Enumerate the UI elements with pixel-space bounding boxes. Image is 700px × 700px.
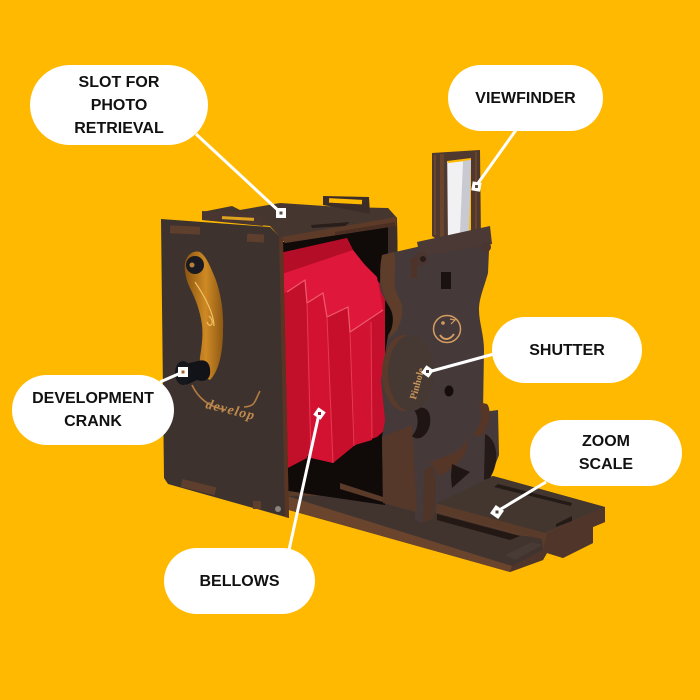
front standard board <box>380 226 499 523</box>
leader: zoom scale <box>490 482 546 519</box>
top panel of box <box>202 196 397 243</box>
development crank <box>175 251 223 385</box>
develop engraving <box>192 385 260 424</box>
leader: viewfinder <box>471 130 516 192</box>
label: viewfinder: VIEWFINDER <box>475 90 576 106</box>
label: development crank: CRANK <box>64 413 122 430</box>
camera box: rear top and interior <box>278 208 398 505</box>
label: zoom scale: SCALE <box>579 456 633 473</box>
viewfinder frame <box>432 150 481 247</box>
label: zoom scale <box>530 420 682 486</box>
leader: shutter <box>421 354 494 378</box>
label: slot for photo retrieval <box>30 65 208 145</box>
label: shutter: SHUTTER <box>529 342 605 358</box>
leader: slot for photo retrieval <box>196 134 286 218</box>
label: slot for photo retrieval: PHOTO <box>91 96 147 114</box>
label: bellows <box>164 548 315 614</box>
label: viewfinder <box>448 65 603 131</box>
develop engraving: develop <box>204 397 257 424</box>
label: development crank <box>12 375 174 445</box>
left side panel <box>161 219 289 518</box>
leader: bellows <box>289 407 326 550</box>
label: slot for photo retrieval: RETRIEVAL <box>74 120 164 136</box>
label: zoom scale: ZOOM <box>582 433 630 450</box>
bellows <box>280 238 385 470</box>
label: bellows: BELLOWS <box>200 572 280 590</box>
smiley engraving <box>434 316 460 342</box>
label: slot for photo retrieval: SLOT FOR <box>79 74 159 90</box>
base rail <box>285 476 605 572</box>
label: development crank: DEVELOPMENT <box>32 390 154 407</box>
label: shutter <box>492 317 642 383</box>
leader: development crank <box>160 367 188 382</box>
shutter disc: Pinhole <box>408 366 427 401</box>
shutter disc <box>382 335 434 411</box>
